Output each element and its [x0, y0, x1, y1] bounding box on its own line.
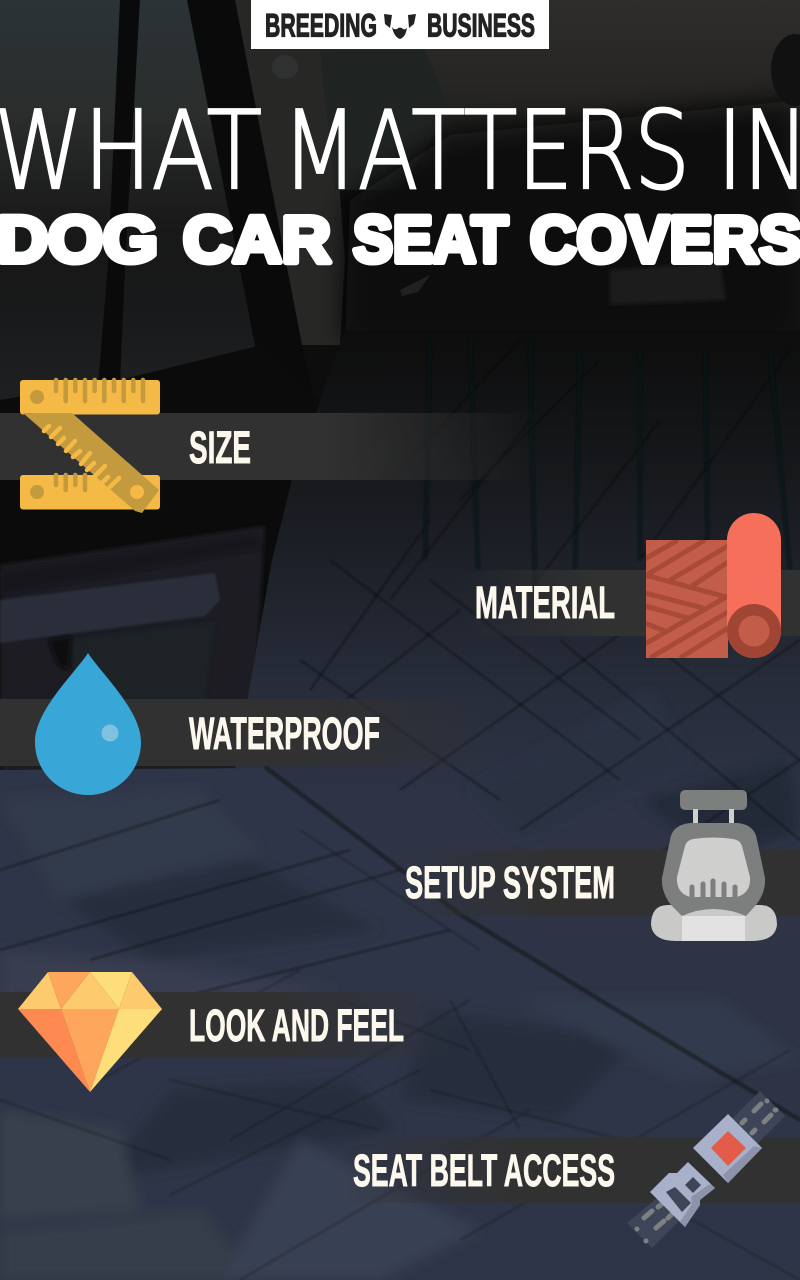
- lighter and darker quilt patches: [0, 690, 800, 1280]
- icon: car seat: [651, 790, 777, 941]
- label: MATERIAL: [475, 577, 615, 628]
- icon: folding ruler: [20, 380, 160, 513]
- label bar: [390, 850, 800, 916]
- label: SEAT BELT ACCESS: [353, 1145, 615, 1196]
- title: [0, 89, 800, 276]
- title line 2: [0, 202, 800, 276]
- icon: seat belt: [627, 1091, 785, 1248]
- label: LOOK AND FEEL: [189, 1000, 404, 1051]
- seat cover: [0, 330, 800, 1280]
- title line 2: CAR: [183, 202, 331, 276]
- logo badge: BUSINESS: [427, 8, 535, 44]
- item: setup system: [390, 790, 800, 941]
- label: SIZE: [189, 422, 251, 473]
- label bar: [0, 413, 540, 480]
- icon: fabric roll: [645, 513, 781, 658]
- title line 1: [0, 89, 800, 214]
- item: seat belt access: [340, 1091, 800, 1248]
- door panel: [0, 345, 320, 780]
- item: waterproof: [0, 653, 500, 795]
- title line 2: SEAT: [353, 202, 508, 276]
- item: material: [460, 513, 800, 658]
- ceiling and rear pillar: [235, 0, 800, 345]
- icon: water drop: [35, 653, 141, 795]
- side windows: [0, 0, 315, 400]
- label: WATERPROOF: [189, 708, 380, 759]
- quilting seams: [0, 340, 800, 1280]
- label bar: [340, 1137, 800, 1203]
- icon: dog face: [384, 14, 416, 39]
- logo badge: BREEDING: [265, 8, 377, 44]
- item: look and feel: [0, 972, 460, 1092]
- label: SETUP SYSTEM: [405, 857, 615, 908]
- label bar: [0, 699, 500, 766]
- item: size: [0, 380, 540, 513]
- logo badge: [251, 0, 549, 49]
- title line 1: MATTERS: [282, 89, 690, 214]
- title line 2: DOG: [0, 202, 158, 276]
- label bar: [460, 570, 800, 636]
- icon: diamond: [18, 972, 162, 1092]
- title line 1: WHAT: [0, 89, 262, 214]
- label bar: [0, 992, 460, 1058]
